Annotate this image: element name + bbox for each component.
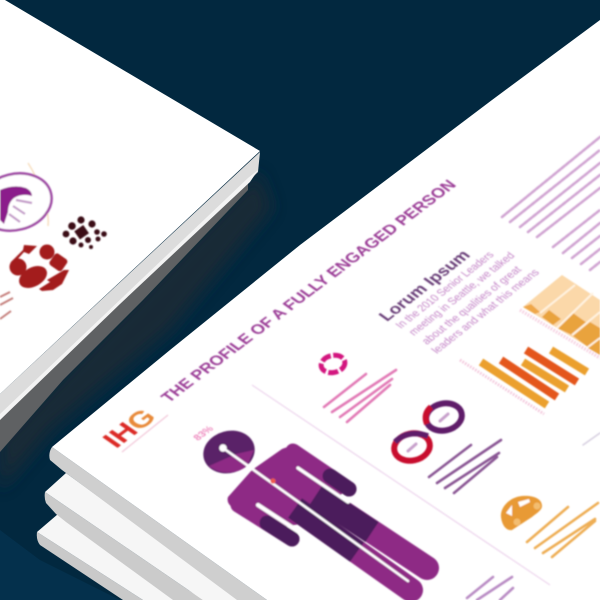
gap lines xyxy=(540,285,600,347)
icon: recycle xyxy=(319,353,347,375)
shadow between stacks xyxy=(0,172,272,490)
bar chart: upper xyxy=(520,275,600,358)
intro paragraph: leaders and what this means xyxy=(430,267,542,356)
value bars xyxy=(523,304,540,314)
divider xyxy=(252,385,550,585)
dark segments xyxy=(330,476,349,489)
intro paragraph: meeting in Seattle, we talked xyxy=(407,251,518,338)
intro paragraph: about the qualities of great xyxy=(420,264,525,347)
icon: car xyxy=(501,496,542,530)
label: percent: 83% xyxy=(192,424,217,443)
logo underline xyxy=(122,415,168,452)
left sheet text fragments xyxy=(0,292,13,319)
background bars xyxy=(523,275,600,355)
logo: IHG: IHG xyxy=(96,404,163,452)
person figure xyxy=(198,425,427,590)
infographic content xyxy=(96,137,600,600)
bottom right text xyxy=(467,433,600,600)
heading: Lorum Ipsum: Lorum Ipsum xyxy=(375,247,474,324)
text block: donuts xyxy=(429,440,501,493)
intro paragraph: In the 2010 Senior Leaders xyxy=(394,250,497,331)
lower-left background tone xyxy=(0,530,120,600)
axis xyxy=(460,360,544,414)
donut chart: red xyxy=(392,430,432,464)
intro paragraph xyxy=(394,250,542,356)
bar chart: lower xyxy=(460,350,587,414)
head xyxy=(198,425,260,479)
title: THE PROFILE OF A FULLY ENGAGED PERSON xyxy=(158,177,460,405)
donut chart: purple xyxy=(424,400,464,434)
icon: hand in circle xyxy=(0,163,58,238)
icon: red people cycle xyxy=(10,244,69,292)
icon: dark dots cluster xyxy=(63,216,107,249)
text block: recycle xyxy=(324,370,396,422)
text block: car xyxy=(527,503,598,557)
torso and limbs xyxy=(228,447,345,530)
paper stack: left xyxy=(0,0,260,452)
axis xyxy=(520,310,600,358)
centre line and arm slits xyxy=(223,448,408,581)
right column text xyxy=(502,137,600,270)
